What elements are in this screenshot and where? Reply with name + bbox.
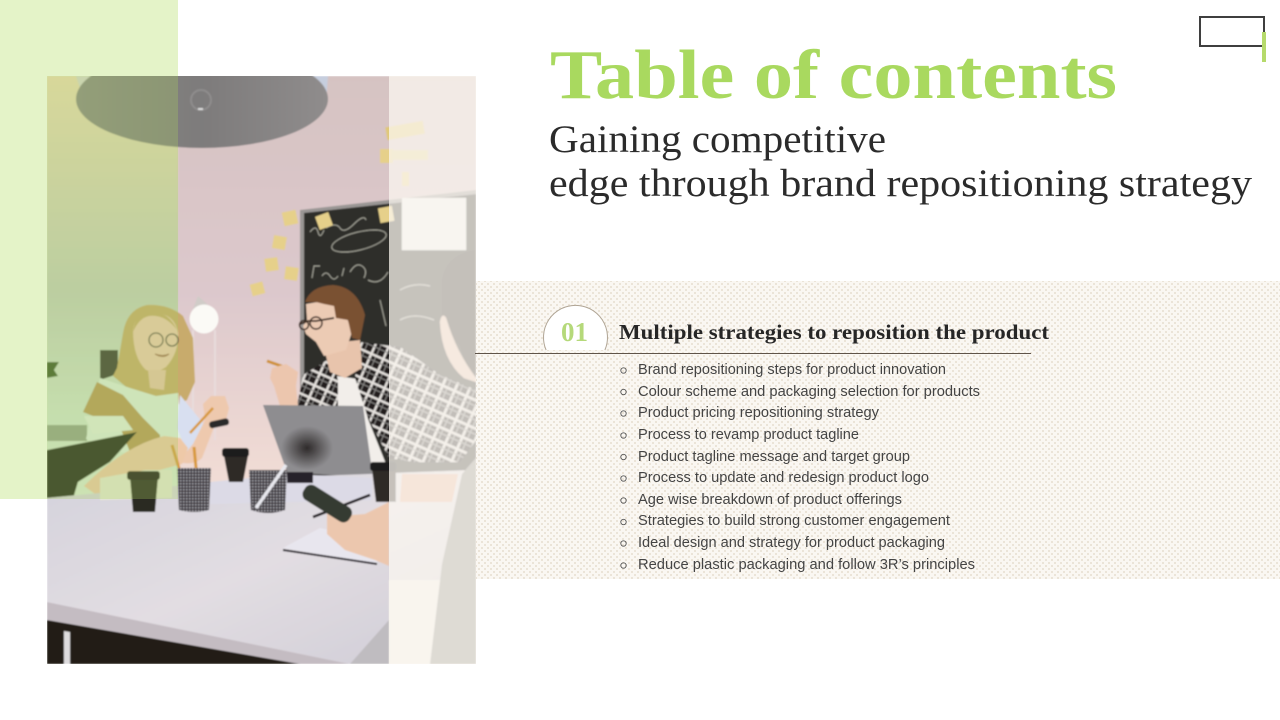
hair — [113, 305, 195, 405]
list items: Colour scheme and packaging selection for products — [638, 384, 980, 400]
face — [133, 313, 178, 371]
shirt — [86, 377, 181, 452]
wall — [47, 76, 476, 506]
bullets — [621, 368, 626, 568]
section number badge: 01 — [561, 317, 588, 347]
patterned contents panel — [476, 281, 1280, 579]
glasses — [149, 333, 178, 347]
neck — [323, 340, 362, 378]
background green block — [0, 0, 178, 499]
subtitle: edge through brand repositioning strategy — [549, 162, 1253, 205]
list items: Ideal design and strategy for product packaging — [638, 535, 945, 551]
green tint over photo — [47, 76, 178, 499]
table — [47, 470, 476, 664]
shirt left — [297, 357, 338, 406]
wall below laptop — [263, 470, 283, 478]
shirt right, continuing behind veil — [355, 342, 476, 462]
sticky notes — [250, 121, 428, 296]
desk lamp — [189, 297, 219, 408]
plant and back furniture — [47, 350, 118, 441]
neck — [148, 370, 166, 390]
glasses — [300, 318, 334, 324]
hand with pencil — [267, 361, 287, 368]
laptop — [263, 405, 373, 478]
list items: Product tagline message and target group — [638, 449, 910, 465]
left arm — [84, 436, 188, 496]
white veil over photo — [389, 76, 476, 664]
white t-shirt — [336, 375, 386, 474]
papers and notebook on table — [100, 470, 380, 564]
subtitle — [549, 118, 1253, 205]
foreground person, right — [400, 315, 476, 664]
pencil holders — [172, 445, 287, 513]
sweater — [82, 382, 161, 451]
man in plaid shirt — [267, 285, 476, 474]
list items: Strategies to build strong customer engagement — [638, 513, 950, 529]
title: Table of contents — [550, 37, 1117, 114]
list items: Process to revamp product tagline — [638, 427, 859, 443]
pen and phone in hand — [300, 482, 389, 566]
list items: Brand repositioning steps for product innovation — [638, 362, 946, 378]
contents list — [621, 362, 980, 573]
face — [303, 298, 352, 356]
heading rule — [475, 353, 1031, 354]
list items — [638, 362, 980, 573]
woman — [47, 305, 230, 501]
list items: Product pricing repositioning strategy — [638, 405, 880, 421]
list items: Reduce plastic packaging and follow 3R’s principles — [638, 557, 975, 573]
right arm — [178, 396, 229, 463]
subtitle: Gaining competitive — [549, 118, 886, 161]
hair — [305, 285, 365, 340]
list items: Process to update and redesign product logo — [638, 470, 929, 486]
blackboard — [300, 190, 476, 480]
corner frame icon — [1200, 17, 1266, 62]
smile — [155, 354, 169, 356]
ceiling lamp — [76, 76, 329, 149]
tablet — [47, 432, 137, 500]
photo: team meeting around a table — [47, 50, 476, 664]
section number badge — [543, 305, 608, 350]
paper — [178, 394, 204, 450]
list items: Age wise breakdown of product offerings — [638, 492, 902, 508]
coffee cups — [127, 448, 396, 512]
section heading: Multiple strategies to reposition the product — [619, 320, 1049, 344]
